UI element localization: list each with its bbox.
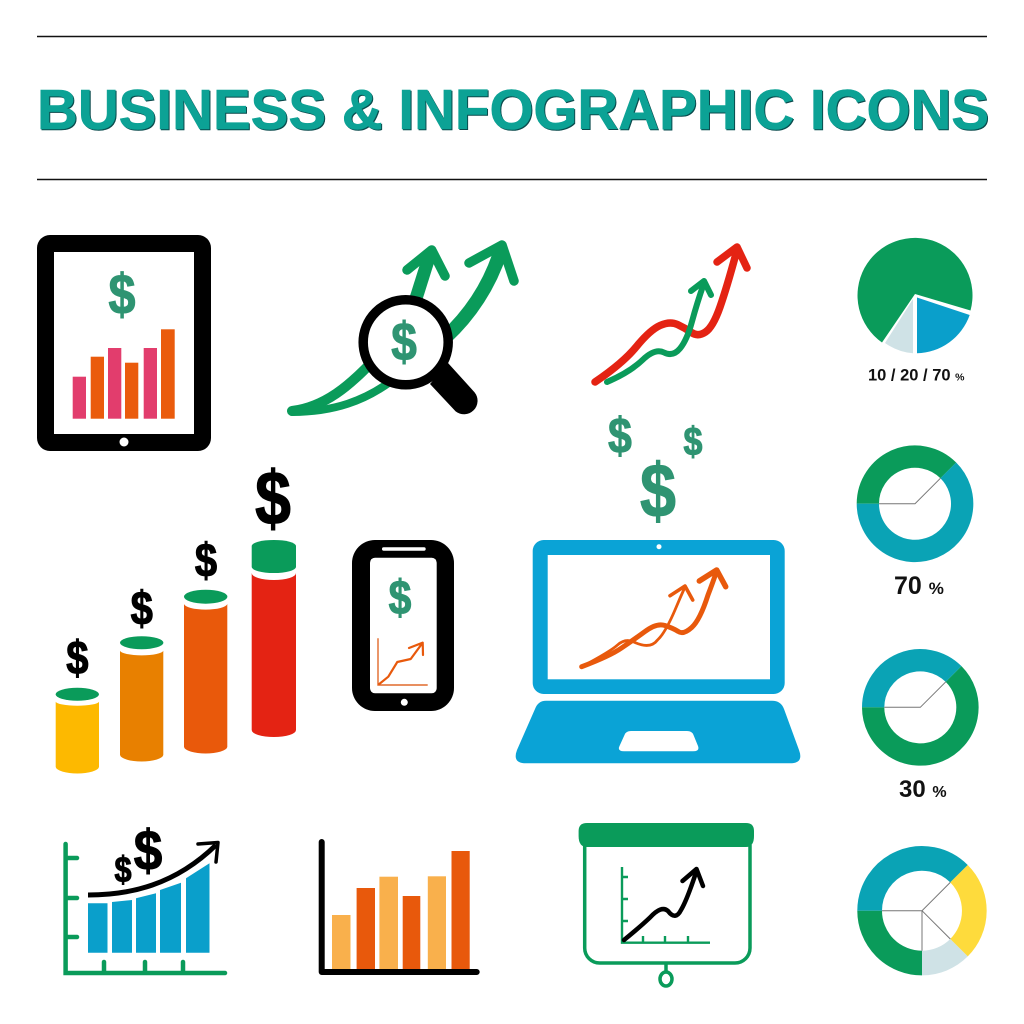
chart: pie 10 / 20 / 70 % [858,238,973,353]
chart: donut 70 % [868,457,962,551]
chart: four-segment donut [870,858,974,963]
icon: floating dollar signs: $ [608,408,632,464]
tablet bars [73,329,175,419]
magnifier dollar sign: $ [391,312,417,372]
label: 10 / 20 / 70 %: 10 / 20 / 70 % [868,366,965,384]
title: BUSINESS & INFOGRAPHIC ICONS [37,78,989,142]
cylinder 3: $ [195,536,217,587]
icon: presentation board [579,823,754,986]
chart: donut 30 % [873,660,967,755]
icon: floating dollar signs: $ [640,448,676,533]
chart: blue bars with rising arrow [66,820,225,973]
cylinder 1: $ [66,633,88,685]
chart: orange bar chart [322,842,477,972]
laptop arrows [582,570,726,667]
label: 70 %: 70 % [894,572,944,600]
icon: floating dollar signs: $ [684,418,703,464]
icon: magnifier over growth arrows [292,245,514,414]
icon: laptop with trend arrows [516,540,800,763]
cylinder 3 [184,536,227,754]
tablet dollar sign: $ [109,263,135,327]
icon: red and green trend arrows [595,247,747,382]
icon: floating dollar signs [608,408,703,533]
phone dollar sign: $ [389,572,412,625]
icon: tablet with bar chart [37,235,211,451]
cylinder 2 [120,584,163,762]
cylinder 4 [252,456,296,737]
label: 30 %: 30 % [899,776,947,803]
large dollar sign: $ [134,820,162,883]
small dollar sign: $ [114,851,132,891]
icon: stepped cylinders with dollar signs [56,456,296,774]
cylinder 4: $ [255,456,291,541]
icon: smartphone with chart [352,540,454,711]
cylinder 2: $ [131,584,153,635]
cylinder 1 [56,633,99,774]
